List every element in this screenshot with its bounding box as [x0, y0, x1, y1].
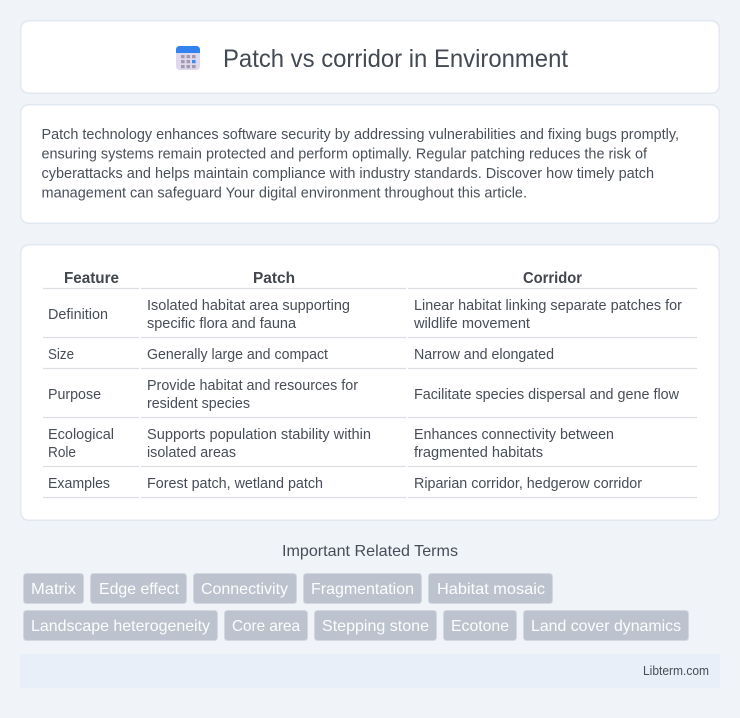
text block: introduction paragraph: [42, 127, 679, 202]
table header row: Patch: [253, 270, 295, 287]
tag: Land cover dynamics: [524, 610, 688, 640]
table row: size: Narrow and elongated: [414, 347, 554, 363]
table row: definition: Isolated habitat area supporting: [147, 298, 350, 314]
table row: examples: Examples: [48, 476, 110, 492]
tag: Habitat mosaic: Habitat mosaic: [437, 581, 545, 598]
table row: examples: Forest patch, wetland patch: [147, 476, 323, 492]
table row: ecological role: fragmented habitats: [414, 445, 543, 461]
table row: purpose: Facilitate species dispersal and gene flow: [414, 387, 680, 403]
tag: Fragmentation: [304, 574, 422, 604]
table row: purpose: Provide habitat and resources for: [147, 378, 358, 394]
table row: purpose: [43, 378, 697, 418]
tag: Edge effect: Edge effect: [99, 581, 180, 598]
table row: ecological role: Ecological: [48, 427, 114, 443]
panel: introduction: [21, 105, 719, 223]
table row: definition: wildlife movement: [413, 316, 530, 332]
table row: examples: Riparian corridor, hedgerow corridor: [414, 476, 642, 492]
table header row: Feature: [64, 270, 119, 287]
title: Patch vs corridor in Environment: [223, 45, 568, 73]
tag: Core area: [224, 610, 308, 640]
text block: introduction paragraph: cyberattacks and helps maintain compliance with industry standards. Discover how timely patch: [42, 166, 654, 182]
table row: size: Size: [48, 347, 74, 363]
tag: Core area: Core area: [232, 618, 300, 635]
footer: [20, 654, 720, 688]
table row: ecological role: Role: [48, 445, 76, 461]
tag: Habitat mosaic: [428, 574, 552, 604]
heading: important related terms: Important Related Terms: [282, 543, 458, 560]
table row: definition: [43, 298, 697, 338]
panel: header: [21, 21, 719, 93]
tag: Matrix: [24, 574, 84, 604]
tag group: related terms: [24, 574, 688, 640]
table header row: Corridor: [523, 270, 582, 287]
footer credit: Libterm.com: [643, 664, 709, 678]
tag: Connectivity: [194, 574, 296, 604]
tag: Ecotone: Ecotone: [451, 618, 509, 635]
table row: purpose: resident species: [147, 396, 250, 412]
tag: Connectivity: Connectivity: [201, 581, 288, 598]
table row: ecological role: [43, 427, 697, 466]
tag: Landscape heterogeneity: Landscape heterogeneity: [31, 618, 210, 635]
tag: Land cover dynamics: Land cover dynamics: [531, 618, 681, 635]
tag: Edge effect: [90, 574, 186, 604]
table header row: [43, 270, 697, 288]
tag: Fragmentation: Fragmentation: [311, 581, 414, 598]
table row: ecological role: Supports population stability within: [147, 427, 371, 443]
tag: Ecotone: [444, 610, 516, 640]
table row: definition: Linear habitat linking separate patches for: [414, 298, 682, 314]
table row: definition: Definition: [48, 307, 108, 323]
icon: calendar: [176, 46, 200, 70]
table row: examples: [43, 476, 697, 498]
tag: Stepping stone: [314, 610, 436, 640]
table row: purpose: Purpose: [48, 387, 101, 403]
table row: ecological role: isolated areas: [147, 445, 236, 461]
panel: comparison table: [21, 245, 719, 520]
tag: Landscape heterogeneity: [24, 610, 218, 640]
table row: ecological role: Enhances connectivity between: [414, 427, 614, 443]
table row: size: [43, 347, 697, 368]
text block: introduction paragraph: management can safeguard Your digital environment throughout this article.: [42, 186, 527, 202]
table row: definition: specific flora and fauna: [147, 316, 296, 332]
text block: introduction paragraph: Patch technology enhances software security by addressing vulnerabilities and fixing bugs promptly,: [42, 127, 679, 143]
tag: Matrix: Matrix: [31, 581, 76, 598]
tag: Stepping stone: Stepping stone: [322, 618, 429, 635]
text block: introduction paragraph: ensuring systems remain protected and perform optimally. Regular patching reduces the risk of: [42, 146, 648, 162]
table row: size: Generally large and compact: [147, 347, 328, 363]
